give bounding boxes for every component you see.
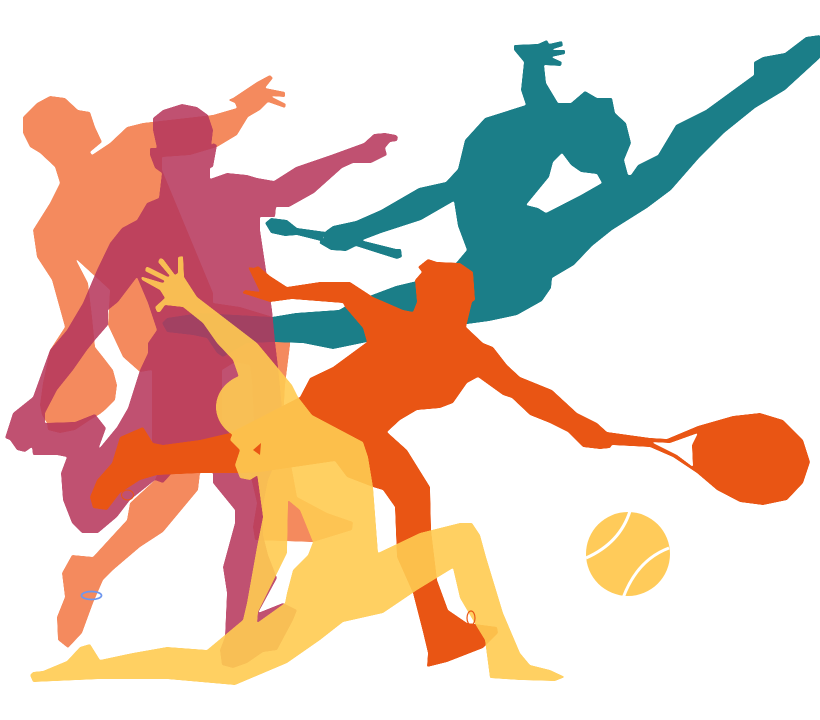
icon: orange ring at shoe [467, 611, 475, 625]
icon: tennis ball [586, 511, 670, 598]
sub-element: orange gap between arms [253, 443, 261, 455]
figure: yellow player lunging [30, 256, 565, 685]
figure: teal gymnast leaping with clubs [162, 35, 820, 357]
sub-element: yellow player head [216, 373, 294, 441]
sub-element: small ring near shoe [122, 490, 134, 500]
sub-element: gymnastic club [265, 218, 402, 259]
figure: orange tennis player with racket [90, 259, 810, 667]
sub-element: salmon ankle ring [82, 592, 102, 600]
figure: crimson athlete [5, 104, 398, 668]
figure: salmon athlete reaching up [23, 75, 353, 648]
